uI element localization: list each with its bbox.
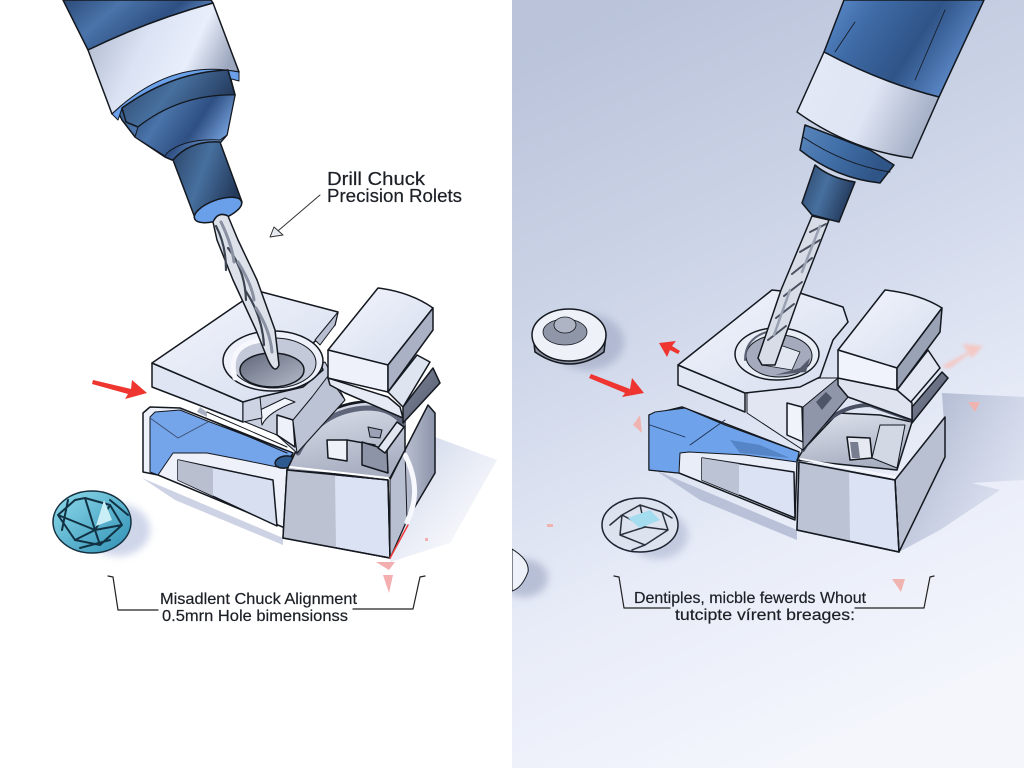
dimension bracket xyxy=(614,576,934,608)
arrow: faded red outward xyxy=(943,344,983,368)
arrow: red misalignment pointer xyxy=(92,380,147,399)
label: drill chuck callout: Drill Chuck xyxy=(327,169,426,189)
caption: left xyxy=(160,591,358,625)
marker: faded red specks xyxy=(547,402,980,592)
block shadow xyxy=(142,437,497,562)
drill body xyxy=(797,0,984,222)
icon: clear gem xyxy=(602,498,688,559)
caption: left: Misadlent Chuck Alignment xyxy=(160,591,358,608)
lower base left with blue channel xyxy=(143,407,296,528)
drill bit xyxy=(213,214,279,369)
top plate with hole xyxy=(678,290,848,412)
panel: left misaligned drilling xyxy=(53,0,497,625)
drill body xyxy=(63,0,245,228)
second plate under box xyxy=(328,355,440,423)
upper box xyxy=(328,288,433,392)
lower base right with cavity xyxy=(283,401,435,558)
lower base right with cavity xyxy=(797,405,945,552)
caption: right: tutcipte vírent breages: xyxy=(675,607,855,624)
marker: faded red xyxy=(376,538,428,593)
chuck cone silhouette xyxy=(118,68,235,160)
label: drill chuck callout xyxy=(270,169,462,237)
icon: metal disc xyxy=(532,309,624,370)
lower base left with blue channel xyxy=(649,407,799,520)
second plate under box xyxy=(838,350,948,423)
dimension bracket xyxy=(108,576,425,610)
pedestal under top plate xyxy=(747,378,848,450)
panel: right aligned drilling xyxy=(500,0,1024,624)
arrow: red pointer xyxy=(589,374,644,397)
caption: right xyxy=(634,590,867,624)
icon: blue gem xyxy=(53,491,150,556)
block shadow xyxy=(655,393,1024,552)
pedestal under top plate xyxy=(243,362,345,453)
arrow: small red outward xyxy=(659,341,680,357)
top plate with hole xyxy=(152,291,338,422)
caption: right: Dentiples, micble fewerds Whout xyxy=(634,590,867,607)
upper box xyxy=(838,290,942,390)
icon: partial gem xyxy=(512,548,551,600)
panel: right background xyxy=(512,0,1024,768)
caption: left: 0.5mrn Hole bimensionss xyxy=(162,608,348,625)
label: drill chuck callout: Precision Rolets xyxy=(327,186,462,206)
drill bit xyxy=(758,216,829,365)
